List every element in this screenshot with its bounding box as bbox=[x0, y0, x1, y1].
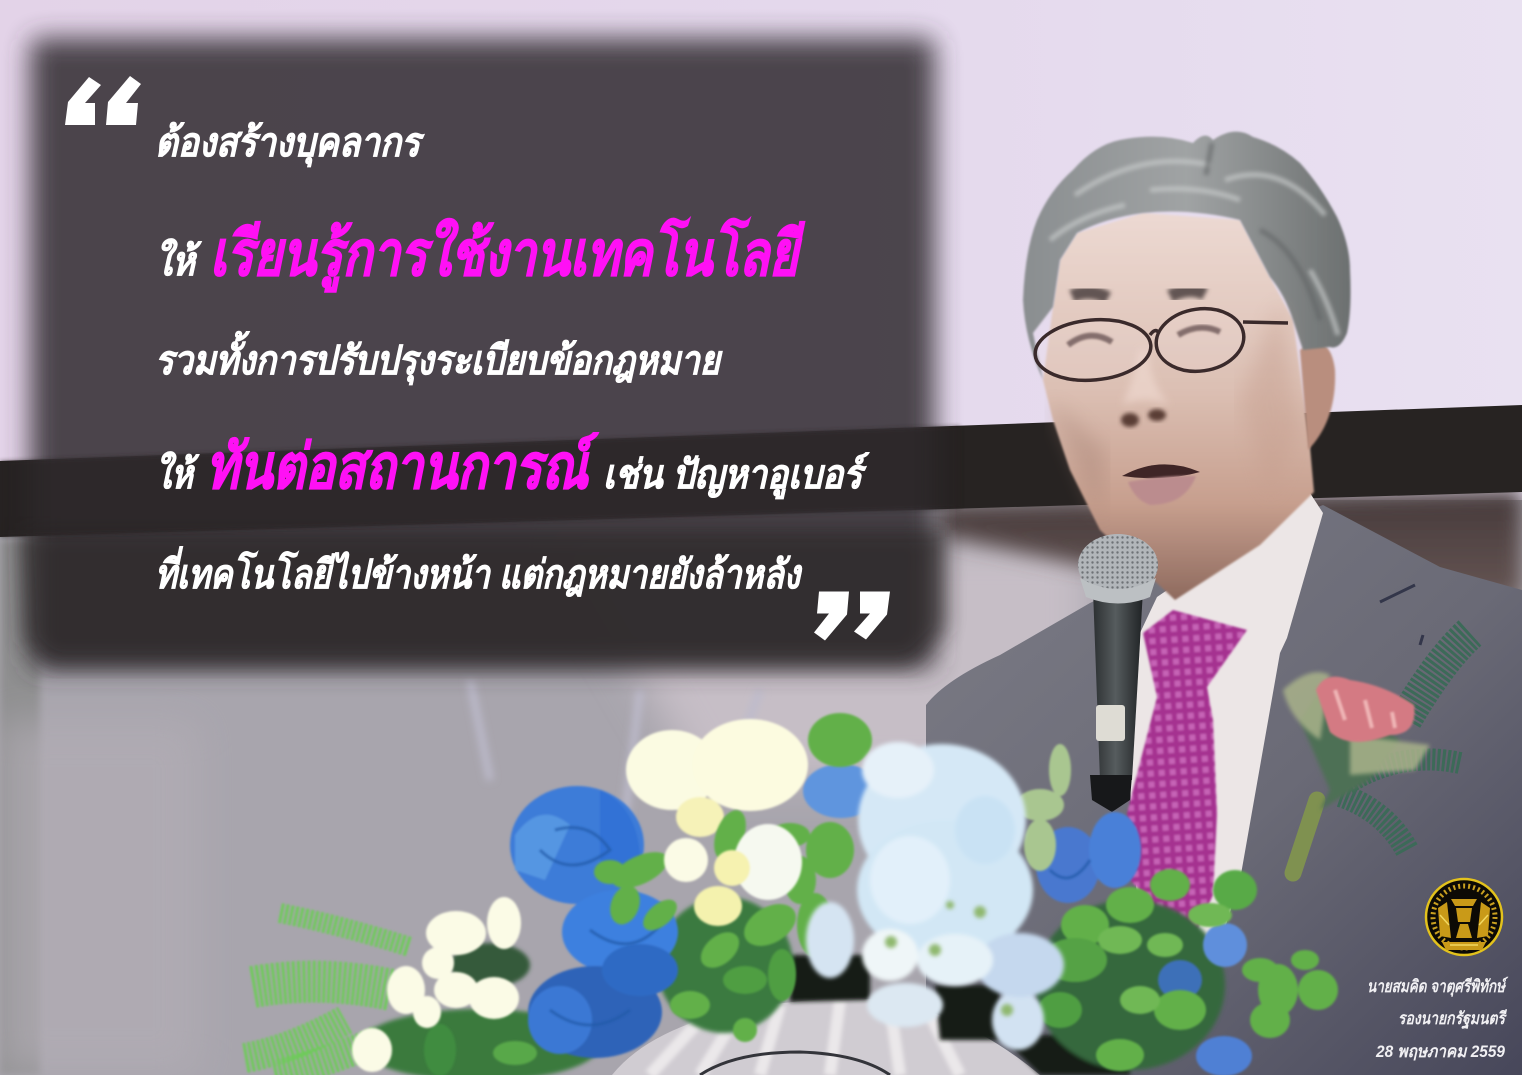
dark foliage base bbox=[360, 897, 1225, 1075]
quote text: เช่น ปัญหาอูเบอร์ bbox=[603, 452, 870, 500]
glasses bbox=[1033, 303, 1288, 385]
dark screen band bbox=[940, 490, 1522, 600]
quote panel bbox=[0, 38, 960, 668]
mouth bbox=[1122, 464, 1200, 478]
flower arrangement bbox=[245, 713, 1338, 1075]
blue roses bbox=[510, 764, 1252, 1075]
white blossoms bbox=[352, 824, 802, 1072]
neck and face bbox=[1043, 213, 1314, 600]
suit bbox=[926, 505, 1522, 1075]
cream peonies bbox=[626, 719, 808, 837]
hair bbox=[1023, 132, 1351, 380]
microphone bbox=[1078, 534, 1158, 812]
ear bbox=[1300, 343, 1335, 450]
quote text: เรียนรู้การใช้งานเทคโนโลยี bbox=[210, 217, 805, 293]
rose petal lines bbox=[540, 828, 1090, 1025]
closing quote mark bbox=[814, 592, 890, 640]
quote text: ให้ bbox=[155, 451, 200, 497]
government seal bbox=[1426, 879, 1502, 955]
quote text: ทันต่อสถานการณ์ bbox=[206, 432, 599, 502]
quote text: ต้องสร้างบุคลากร bbox=[155, 121, 425, 168]
nose bbox=[1122, 350, 1170, 405]
podium bbox=[612, 998, 1040, 1075]
jacket details bbox=[1380, 585, 1423, 645]
pale sprigs bbox=[1016, 744, 1071, 871]
bright green leaves bbox=[424, 713, 1338, 1075]
quote text: ให้ bbox=[155, 238, 202, 284]
boutonniere bbox=[1283, 633, 1470, 873]
signature caption bbox=[1367, 976, 1508, 1061]
fern bbox=[245, 913, 410, 1075]
quote text bbox=[155, 121, 870, 597]
quote text: รวมทั้งการปรับปรุงระเบียบข้อกฎหมาย bbox=[155, 330, 723, 386]
quote text: ที่เทคโนโลยีไปข้างหน้า แต่กฎหมายยังล้าหลัง bbox=[155, 546, 803, 597]
signature caption: 28 พฤษภาคม 2559 bbox=[1375, 1042, 1505, 1061]
opening quote mark bbox=[65, 76, 141, 125]
hydrangea centres bbox=[885, 901, 1013, 1016]
speaker figure bbox=[926, 132, 1522, 1075]
hydrangea bbox=[806, 742, 1064, 1050]
eyes bbox=[1068, 328, 1220, 345]
tie bbox=[1127, 610, 1247, 945]
shirt bbox=[1128, 493, 1323, 960]
hair strands bbox=[1050, 161, 1338, 335]
eyebrows bbox=[1072, 290, 1205, 298]
face shading bbox=[1240, 300, 1300, 500]
